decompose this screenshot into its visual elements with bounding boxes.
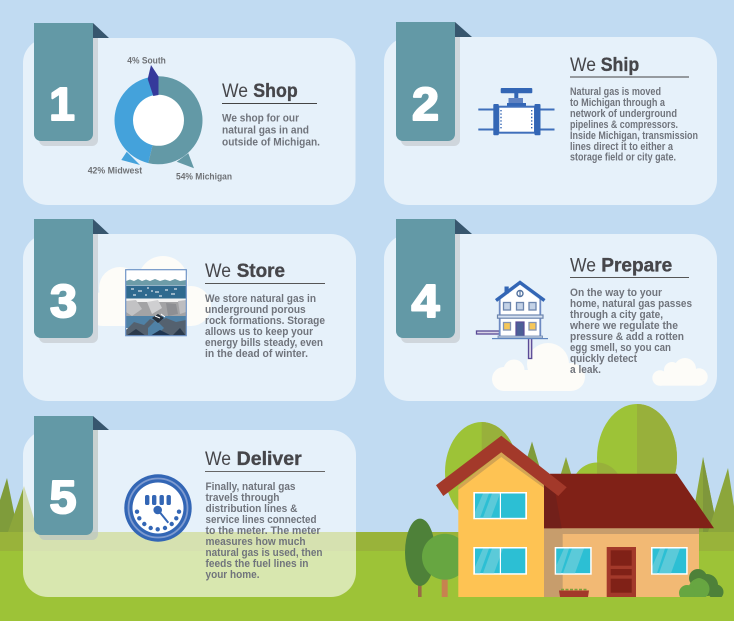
main block wall bbox=[458, 457, 544, 597]
ribbon 1: 1 bbox=[49, 78, 75, 130]
text: ship: storage field or city gate. bbox=[570, 152, 676, 164]
heading 2: Ship bbox=[601, 55, 639, 76]
ribbon 3: 3 bbox=[50, 275, 77, 327]
background trees bbox=[445, 404, 677, 522]
text: deliver: Finally, natural gas bbox=[206, 481, 296, 493]
donut chart: gas sources: 54% Michigan bbox=[176, 170, 232, 181]
heading 4: We bbox=[570, 256, 596, 277]
illustration: house bbox=[436, 436, 714, 597]
roof shadow bbox=[544, 480, 562, 528]
window: wing left bbox=[555, 547, 592, 575]
text: ship: pipelines & compressors. bbox=[570, 119, 678, 131]
ribbon 5 bbox=[34, 416, 109, 540]
heading 3: We bbox=[205, 261, 231, 282]
text: ship: Natural gas is moved bbox=[570, 86, 661, 98]
donut chart: gas sources bbox=[88, 54, 232, 181]
heading 1: Shop bbox=[253, 81, 298, 102]
icon: pipeline valve bbox=[478, 88, 554, 135]
main gable roof bbox=[436, 436, 567, 496]
text: deliver: travels through bbox=[206, 492, 280, 504]
icon: gas meter bbox=[124, 474, 192, 542]
text: ship: network of underground bbox=[570, 108, 677, 120]
flower box bbox=[559, 590, 589, 597]
ribbon 3 bbox=[34, 219, 109, 343]
icon: house with gas lines bbox=[476, 282, 548, 358]
clouds bbox=[492, 343, 708, 391]
text: deliver: natural gas is used, then bbox=[206, 547, 322, 559]
text: prepare: pressure & add a rotten bbox=[570, 331, 684, 343]
panel 2: We Ship bbox=[384, 22, 717, 205]
text: shop: outside of Michigan. bbox=[222, 136, 320, 148]
text: prepare: On the way to your bbox=[570, 287, 662, 299]
panel 3: We Store bbox=[23, 219, 356, 401]
text: prepare: where we regulate the bbox=[569, 320, 678, 332]
text: shop: We shop for our bbox=[222, 112, 299, 124]
text: store: We store natural gas in bbox=[205, 293, 316, 305]
text: deliver: distribution lines & bbox=[206, 503, 298, 515]
text: deliver: to the meter. The meter bbox=[206, 525, 320, 537]
bush bbox=[679, 569, 724, 597]
heading 5: We bbox=[205, 449, 231, 470]
window: upper bbox=[473, 492, 527, 519]
ribbon 2 bbox=[396, 22, 472, 146]
text: store: in the dead of winter. bbox=[205, 348, 308, 360]
text: deliver: service lines connected bbox=[206, 514, 316, 526]
text: deliver: feeds the fuel lines in bbox=[206, 558, 308, 570]
text: ship: to Michigan through a bbox=[570, 97, 665, 109]
text: store: underground porous bbox=[205, 304, 306, 316]
text: shop: natural gas in and bbox=[222, 124, 309, 136]
text: deliver: your home. bbox=[206, 569, 260, 581]
text: store: allows us to keep your bbox=[205, 326, 313, 338]
window: lower left bbox=[473, 547, 527, 575]
donut chart: gas sources: 4% South bbox=[127, 54, 166, 65]
text: prepare: through a city gate, bbox=[570, 309, 663, 321]
text: store: energy bills steady, even bbox=[205, 337, 323, 349]
ribbon 2: 2 bbox=[412, 78, 439, 130]
ribbon 4: 4 bbox=[412, 275, 440, 327]
ribbon 5: 5 bbox=[50, 471, 76, 523]
right wing roof bbox=[544, 474, 714, 528]
panel 1: We Shop bbox=[23, 23, 356, 205]
panel 4: We Prepare bbox=[384, 219, 717, 401]
heading 1: We bbox=[222, 81, 248, 102]
foreground trees bbox=[405, 519, 468, 597]
heading 2: We bbox=[570, 55, 596, 76]
text: prepare: quickly detect bbox=[570, 353, 637, 365]
heading 3: Store bbox=[237, 261, 285, 282]
heading 5: Deliver bbox=[237, 449, 302, 470]
text: ship: Inside Michigan, transmission bbox=[570, 130, 698, 142]
window: wing right bbox=[651, 547, 688, 575]
text: deliver: measures how much bbox=[206, 536, 306, 548]
text: prepare: egg smell, so you can bbox=[570, 342, 671, 354]
panel 5: We Deliver bbox=[23, 416, 356, 597]
heading 4: Prepare bbox=[601, 256, 672, 277]
text: ship: lines direct it to either a bbox=[570, 141, 673, 153]
icon: underground rock layers bbox=[126, 270, 186, 336]
donut chart: gas sources: 42% Midwest bbox=[88, 164, 142, 175]
text: prepare: a leak. bbox=[570, 364, 601, 376]
text: store: rock formations. Storage bbox=[205, 315, 325, 327]
ribbon 4 bbox=[396, 219, 472, 343]
text: prepare: home, natural gas passes bbox=[570, 298, 692, 310]
right wing wall bbox=[544, 528, 699, 597]
cloud behind rock icon bbox=[86, 256, 211, 326]
ribbon 1 bbox=[34, 23, 109, 146]
door bbox=[607, 547, 636, 597]
